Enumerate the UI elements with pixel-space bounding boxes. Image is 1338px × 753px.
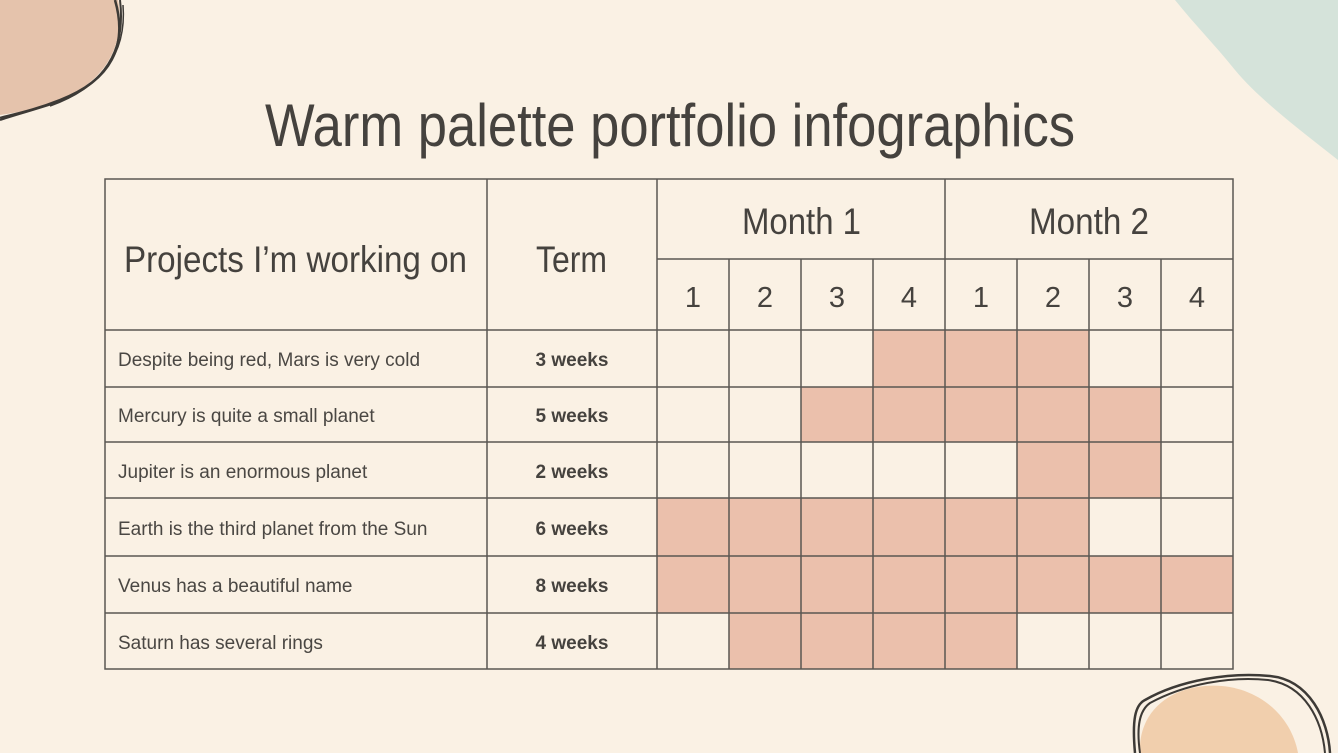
row text: Saturn has several rings (118, 633, 323, 654)
table: 3 weeks (536, 350, 608, 371)
header text: Month 1 (742, 201, 861, 242)
header text: Term (536, 239, 607, 280)
row text: Jupiter is an enormous planet (118, 462, 368, 483)
table: 8 weeks (536, 576, 608, 597)
row text: Venus has a beautiful name (118, 576, 353, 597)
grid lines (105, 179, 1233, 669)
row text: Mercury is quite a small planet (118, 406, 375, 427)
header text: 3 (829, 282, 845, 314)
header text: 2 (1045, 282, 1061, 314)
decoration: top-left blob (0, 0, 123, 120)
header text: Projects I’m working on (124, 239, 467, 280)
title: Warm palette portfolio infographics (265, 92, 1075, 159)
header text: 3 (1117, 282, 1133, 314)
header text: 4 (901, 282, 917, 314)
header text: 1 (973, 282, 989, 314)
decoration: bottom-right blob (1134, 675, 1330, 753)
row text: Earth is the third planet from the Sun (118, 519, 427, 540)
table: 5 weeks (536, 406, 608, 427)
row text: Despite being red, Mars is very cold (118, 350, 420, 371)
row text (118, 350, 427, 654)
table: 4 weeks (536, 633, 608, 654)
header text: 2 (757, 282, 773, 314)
table: 2 weeks (536, 462, 608, 483)
table: 6 weeks (536, 519, 608, 540)
header text: Month 2 (1029, 201, 1149, 242)
header text (124, 201, 1205, 314)
table (105, 179, 1233, 669)
header text: 1 (685, 282, 701, 314)
decoration: top-right blob (1175, 0, 1338, 160)
header text: 4 (1189, 282, 1205, 314)
filled cells (657, 330, 1233, 669)
